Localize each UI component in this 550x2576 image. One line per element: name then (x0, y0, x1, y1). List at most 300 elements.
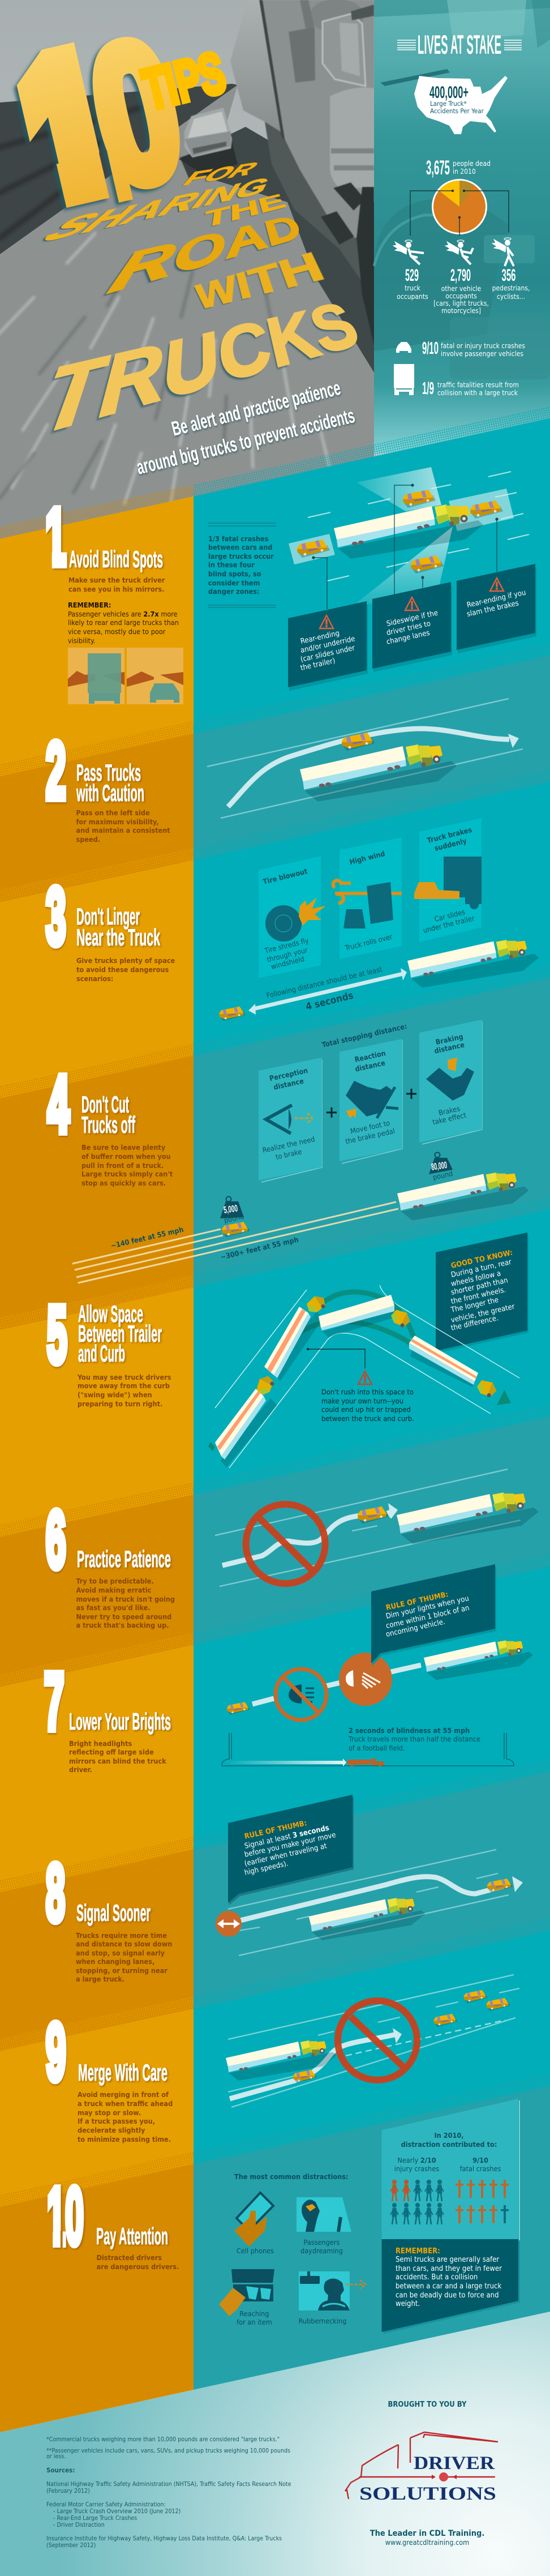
number 8: 8 (46, 1848, 65, 1938)
description: and stop, so signal early (76, 1949, 165, 1957)
beam path (252, 1665, 421, 1704)
box: rear-ending: the trailer) (300, 657, 336, 673)
footnotes and sources: National Highway Traffic Safety Administration (NHTSA), Traffic Safety Facts Research Note (46, 2481, 291, 2488)
tagline and website: www.greatcdltraining.com (385, 2538, 469, 2547)
description: preparing to turn right. (78, 1400, 162, 1408)
heading: Don't Linger (76, 903, 140, 930)
skid marks (72, 1202, 398, 1283)
box: rear-ending: Rear-ending (300, 629, 340, 646)
brought to you by: BROUGHT TO YOU BY (388, 2400, 467, 2409)
tip 7: lower your brights text (44, 1657, 171, 1774)
icon: reaching for an item: for an item (237, 2318, 272, 2326)
tip 2: pass trucks text: Pass Trucks (76, 759, 141, 786)
callout: rule of thumb (371, 1564, 496, 1666)
description: If a truck passes you, (78, 2117, 155, 2125)
stat: truck occupants (397, 266, 428, 301)
callout: remember: than cars, and they get in fewer (396, 2265, 502, 2273)
weight: 5,000 pound (220, 1197, 245, 1225)
weight: 80,000 pound: pound (432, 1169, 454, 1182)
description: a truck when traffic ahead (78, 2099, 173, 2108)
warning callout (307, 1348, 414, 1423)
title: THE: THE (201, 191, 290, 234)
heading: and Curb (78, 1340, 125, 1367)
description: ("swing wide") when (78, 1390, 152, 1399)
description: Avoid making erratic (76, 1586, 151, 1594)
weight: 5,000 pound: 5,000 (223, 1203, 238, 1216)
description: Bright headlights (69, 1739, 132, 1748)
icon: reaching for an item: Reaching (239, 2309, 269, 2318)
heading: most common distractions: The most common distractions: (234, 2172, 349, 2181)
stat: traffic fatalities: 1/9 (422, 378, 434, 398)
stat: people dead: people dead (453, 160, 491, 168)
map: United States with accidents per year (414, 76, 508, 134)
merging path arrow (230, 2028, 402, 2099)
panel: distraction statistics: Nearly 2/10 (397, 2156, 436, 2164)
callout: remember: can be deadly due to force and (396, 2291, 499, 2300)
footnotes and sources: (September 2012) (46, 2542, 96, 2549)
description: mirrors can blind the truck (69, 1757, 166, 1765)
logo: driver solutions: DRIVER (414, 2453, 495, 2474)
panel: truck brakes suddenly (414, 818, 482, 942)
panel: distraction statistics: injury crashes (394, 2164, 439, 2173)
panel: reaction distance: Move foot to (350, 1119, 390, 1136)
footnotes and sources: **Passenger vehicles include cars, vans, SUVs, and pickup trucks weighing 10,000 pounds (46, 2447, 290, 2454)
panel: distraction statistics: 9/10 (472, 2156, 488, 2164)
footnotes and sources: - Large Truck Crash Overview 2010 (June 2012) (53, 2508, 181, 2515)
tip 10 distractions (219, 2099, 520, 2334)
icon: vehicle occupant angel (445, 240, 473, 264)
tip 9 diagram (226, 1975, 519, 2107)
car (219, 1007, 246, 1021)
description: Give trucks plenty of space (76, 956, 175, 965)
box: slam brakes (457, 564, 536, 653)
description: a large truck. (76, 1975, 124, 1983)
description (77, 1373, 171, 1408)
callout: rule of thumb (228, 1795, 354, 1905)
photo: semi truck side (230, 0, 374, 345)
callout: rule of thumb: oncoming vehicle. (385, 1618, 446, 1639)
description (78, 2090, 173, 2143)
description (68, 576, 165, 593)
truck (334, 504, 483, 559)
tip 6: practice patience text (46, 1495, 175, 1629)
warning callout: Don't rush into this space to (321, 1388, 414, 1397)
truck (397, 1492, 539, 1544)
number 9: 9 (46, 2007, 66, 2097)
truck (300, 744, 457, 802)
stat: other vehicle occupants (433, 266, 489, 315)
box: slam brakes: Rear-ending if you (466, 588, 527, 610)
callout: good to know: the front wheels. (450, 1286, 506, 1306)
icon: cell phones: Cell phones (237, 2246, 274, 2255)
callout: good to know: GOOD TO KNOW: (450, 1248, 513, 1270)
car: side upper (403, 490, 436, 508)
box: rear-ending: and/or underride (300, 635, 356, 655)
description: reflecting off large side (69, 1748, 154, 1756)
following distance arrow (248, 965, 407, 1015)
tip 3 scenarios (219, 818, 539, 1021)
following distance arrow: Following distance should be at least (265, 965, 383, 1000)
note: 1/3 fatal crashes: in these four (208, 560, 255, 569)
description (81, 1143, 173, 1187)
car (358, 1507, 389, 1524)
description: as fast as you'd like. (76, 1603, 151, 1612)
note: 1/3 fatal crashes: blind spots, so (208, 570, 261, 578)
car (227, 1702, 250, 1715)
stat: other vehicle occupants: occupants (445, 292, 477, 300)
heading: total stopping distance: Total stopping distance: (321, 1022, 408, 1049)
callout: rule of thumb: Signal at least 3 seconds (244, 1824, 330, 1851)
panel: truck brakes suddenly: suddenly (433, 836, 468, 853)
map: United States with accidents per year: Accidents Per Year (430, 107, 484, 115)
icon: turn signal (216, 1911, 242, 1937)
tip 8: signal sooner text: Signal Sooner (76, 1899, 151, 1926)
stat: pedestrians: 356 (501, 266, 516, 285)
description: can see you in his mirrors. (68, 585, 164, 593)
number 7: 7 (44, 1657, 65, 1747)
stat: truck occupants: 529 (405, 266, 419, 285)
title: TIPS: TIPS (137, 40, 231, 122)
callout: rule of thumb: Dim your lights when you (385, 1594, 470, 1621)
tip 4: don't cut trucks off text: Trucks off (81, 1111, 135, 1138)
truck (397, 1173, 528, 1221)
panel: braking distance: Braking (435, 1032, 464, 1046)
stat: people dead: in 2010 (453, 168, 476, 176)
car merging (293, 2070, 317, 2083)
weaving path arrow (222, 1503, 398, 1565)
heading: lives at stake (397, 29, 522, 59)
icon: high beam in circle (339, 1653, 392, 1706)
callout: rule of thumb: come within 1 block of an (385, 1604, 470, 1631)
description (76, 1931, 172, 1983)
panel: truck brakes suddenly: under the trailer (422, 914, 475, 935)
truck (309, 1898, 426, 1940)
icon: low beam prohibited (276, 1669, 326, 1720)
callout: rule of thumb: RULE OF THUMB: (385, 1590, 449, 1612)
description: Trucks require more time (76, 1931, 167, 1940)
callout: rule of thumb: before you make your move (244, 1831, 337, 1859)
panel: tire blowout: Tire shreds fly (263, 936, 310, 955)
heading (76, 759, 144, 806)
panel: tire blowout: through your (266, 945, 308, 964)
panel: perception distance: Realize the need (261, 1135, 316, 1154)
icon: cell phones (234, 2193, 274, 2255)
description: and distance to slow down (76, 1940, 172, 1948)
callout: good to know: vehicle, the greater (450, 1303, 515, 1325)
panel: perception distance: to brake (275, 1147, 303, 1161)
subtitle (134, 376, 357, 479)
stat: other vehicle occupants: [cars, light trucks, (433, 299, 489, 307)
car: side lower (411, 555, 444, 574)
label: car stopping distance: ~140 feet at 55 mph (110, 1225, 184, 1250)
panel: lives at stake (393, 29, 530, 398)
main orange column (0, 497, 194, 2432)
title: WITH: WITH (194, 245, 332, 318)
note: seconds of blindness: 2 seconds of blindness at 55 mph (349, 1726, 470, 1735)
callout: good to know: During a turn, rear (450, 1258, 513, 1280)
stat: truck occupants: occupants (397, 293, 428, 301)
tip 5: allow space text (47, 1290, 171, 1408)
warning callout: could end up hit or trapped (321, 1406, 411, 1414)
callout: remember: between a car and a large truck (396, 2282, 501, 2291)
header photo: highway scene (0, 0, 550, 544)
icon: passengers daydreaming (297, 2197, 351, 2255)
heading (78, 1300, 162, 1367)
icon: truck occupant angel (393, 240, 424, 264)
tip 1 blind spot diagram (208, 467, 536, 691)
tip 4 stopping distance (72, 1020, 528, 1283)
weight: 80,000 pound: 80,000 (431, 1159, 448, 1173)
box: slam brakes: slam the brakes (466, 599, 519, 619)
curb lines (215, 1285, 519, 1468)
remember note: REMEMBER: (68, 601, 111, 609)
subtitle: Be alert and practice patience (169, 376, 343, 440)
note: 1/3 fatal crashes: danger zones: (208, 587, 260, 596)
connector lines (312, 484, 498, 609)
passing arrow (228, 729, 519, 807)
note: 1/3 fatal crashes: consider them (208, 579, 260, 587)
note: 1/3 fatal crashes: 1/3 fatal crashes (208, 534, 269, 543)
tip 2: pass trucks text: with Caution (76, 780, 144, 806)
remember note: vice versa, mostly due to poor (68, 627, 166, 636)
number 2: 2 (46, 726, 66, 816)
panel: high wind (333, 837, 402, 959)
footnotes and sources: - Rear-End Large Truck Crashes (53, 2515, 137, 2522)
direction arrow (497, 1390, 511, 1405)
title: SHARING: SHARING (26, 173, 274, 252)
wheel paths (290, 1292, 414, 1343)
description: for maximum visibility, (76, 818, 159, 826)
stat: pedestrians: cyclists... (497, 293, 525, 301)
tagline and website: The Leader in CDL Training. (370, 2529, 484, 2538)
icon: rubbernecking (299, 2271, 366, 2325)
panel: reaction distance (340, 1039, 402, 1163)
description: Pass on the left side (76, 808, 150, 817)
trailer positions (208, 1295, 478, 1467)
football field bracket (222, 1733, 514, 1766)
illustration: driver view from truck and car (68, 648, 183, 704)
tip 2 diagram: passing on the left (207, 699, 523, 818)
description: Make sure the truck driver (68, 576, 165, 584)
description: are dangerous drivers. (96, 2262, 179, 2271)
stat: traffic fatalities (394, 364, 519, 398)
description (76, 956, 175, 983)
map: United States with accidents per year: 400,000+ (429, 83, 469, 102)
description: Large trucks simply can't (81, 1170, 173, 1178)
stat: truck occupants: truck (405, 284, 421, 292)
heading (81, 1091, 135, 1138)
prohibition sign (338, 2001, 417, 2080)
box: rear-ending (288, 601, 368, 691)
description: Distracted drivers (96, 2253, 162, 2262)
description: stop as quickly as cars. (81, 1179, 166, 1187)
main teal column (194, 418, 550, 2390)
title: FOR: FOR (177, 157, 265, 190)
panel: distraction statistics: In 2010, (434, 2131, 464, 2139)
signal path arrow (240, 1876, 523, 1920)
icon: reaching for an item (219, 2269, 274, 2326)
tip 5: allow space text: Between Trailer (78, 1320, 162, 1347)
tagline and website (370, 2529, 484, 2547)
icon: rubbernecking: Rubbernecking (299, 2317, 346, 2325)
tip 9: merge with care text: Merge With Care (78, 2059, 167, 2086)
box: sideswipe (372, 582, 452, 672)
car (487, 1878, 513, 1893)
footnotes and sources: Sources: (46, 2466, 75, 2474)
tip 4: don't cut trucks off text (48, 1059, 173, 1187)
icon: passengers daydreaming: Passengers (304, 2238, 340, 2246)
number 10: 10 (47, 2171, 84, 2261)
cabs (253, 1294, 499, 1400)
tip 8: signal sooner text (46, 1848, 172, 1983)
alternating darker bands (0, 406, 550, 2432)
icons: fatal crosses (456, 2180, 509, 2223)
panel: tire blowout: Tire blowout (262, 867, 308, 886)
number 4: 4 (48, 1059, 70, 1149)
tip 1: avoid blind spots text (45, 492, 183, 704)
callout: rule of thumb: RULE OF THUMB: (244, 1819, 308, 1841)
footnotes and sources: *Commercial trucks weighing more than 10,000 pounds are considered "large trucks." (46, 2436, 280, 2443)
description: pull in front of a truck. (81, 1161, 164, 1170)
note: 1/3 fatal crashes: large trucks occur (208, 552, 274, 560)
panel: reaction distance: the brake pedal (345, 1127, 396, 1145)
panel: perception distance: distance (273, 1076, 304, 1092)
description: may stop or slow. (78, 2108, 141, 2117)
warning callout: make your own turn--you (321, 1397, 403, 1406)
panel: truck brakes suddenly: Car slides (433, 908, 466, 923)
subtitle: around big trucks to prevent accidents (134, 404, 357, 479)
title: TRUCKS: TRUCKS (19, 292, 371, 464)
number 3: 3 (46, 871, 66, 961)
number 1: 1 (45, 492, 66, 582)
road dashes (308, 472, 529, 581)
panel: distraction statistics: distraction contributed to: (401, 2140, 497, 2149)
description: to minimize passing time. (78, 2135, 171, 2143)
remember note: Passenger vehicles are 2.7x more (68, 610, 178, 618)
remember note: likely to rear end large trucks than (68, 618, 179, 627)
footnotes and sources: or less. (46, 2453, 66, 2460)
title: ROAD: ROAD (88, 210, 310, 314)
callout: good to know: the difference. (450, 1314, 499, 1333)
panel: braking distance: Brakes (438, 1104, 461, 1117)
heading: Don't Cut (81, 1091, 129, 1118)
panel: distraction statistics (381, 2099, 519, 2240)
distance arrow (225, 1758, 346, 1766)
description: Be sure to leave plenty (81, 1143, 166, 1152)
map: United States with accidents per year: Large Truck* (430, 100, 467, 108)
title: 10: 10 (6, 0, 199, 244)
description: scenarios: (76, 974, 113, 983)
footnotes and sources (46, 2436, 291, 2549)
description: decelerate slightly (78, 2126, 145, 2134)
tip 10: pay attention text: Pay Attention (96, 2223, 168, 2249)
description: stopping, or turning near (76, 1966, 167, 1975)
truck (407, 940, 539, 988)
stat: passenger vehicles: involve passenger vehicles (441, 350, 523, 358)
stat: pedestrians (492, 266, 530, 301)
stat: passenger vehicles (396, 338, 525, 358)
stat: pedestrians: pedestrians, (492, 284, 530, 292)
stat: traffic fatalities: traffic fatalities result from (437, 381, 519, 389)
tip 5 turn diagram (208, 1233, 528, 1468)
footnotes and sources: Federal Motor Carrier Safety Administration: (46, 2501, 166, 2508)
description: when changing lanes, (76, 1957, 154, 1966)
logo: driver solutions (345, 2432, 498, 2504)
description: Avoid merging in front of (78, 2090, 169, 2099)
truck (424, 1640, 533, 1680)
note: 1/3 fatal crashes (208, 523, 276, 607)
tip 1: avoid blind spots text: Avoid Blind Spots (69, 546, 163, 572)
panel: distraction statistics: fatal crashes (460, 2164, 501, 2173)
description: a truck that's backing up. (76, 1621, 169, 1629)
box: sideswipe: change lanes (386, 629, 431, 647)
panel: perception distance: Perception (269, 1066, 308, 1082)
description: You may see truck drivers (77, 1373, 171, 1381)
icon: passengers daydreaming: daydreaming (300, 2246, 343, 2255)
warning callout: between the truck and curb. (321, 1415, 414, 1423)
tip 8 diagram (216, 1795, 523, 1955)
following distance arrow: 4 seconds (304, 990, 355, 1013)
description: move away from the curb (78, 1381, 170, 1390)
stat: passenger vehicles: 9/10 (422, 338, 439, 358)
callout: good to know (436, 1233, 528, 1353)
description: driver. (69, 1765, 92, 1774)
note: seconds of blindness (348, 1726, 480, 1752)
text: Practice Patience (77, 1546, 171, 1572)
label: truck stopping distance: ~300+ feet at 55 mph (220, 1235, 299, 1261)
tip 9: merge with care text (46, 2007, 173, 2143)
panel: high wind: High wind (349, 849, 386, 866)
panel: reaction distance: Reaction (354, 1049, 386, 1064)
panel: high wind: Truck rolls over (343, 932, 393, 952)
panel: braking distance (419, 1020, 482, 1144)
panel: tire blowout (259, 856, 326, 978)
cars ahead (434, 1990, 510, 2027)
panel: braking distance: distance (433, 1040, 465, 1055)
danger zones (289, 467, 514, 607)
text: Lower Your Brights (69, 1708, 171, 1735)
callout: rule of thumb: (earlier when traveling at (244, 1842, 328, 1868)
stat: passenger vehicles: fatal or injury truck crashes (441, 342, 525, 350)
callout: remember: accidents. But a collision (396, 2273, 478, 2282)
description (69, 1739, 166, 1774)
description (76, 808, 170, 844)
number 6: 6 (46, 1495, 66, 1585)
remember note: visibility. (68, 636, 95, 645)
description: and maintain a consistent (76, 826, 170, 835)
description: moves if a truck isn't going (76, 1595, 175, 1603)
remember note (68, 601, 179, 645)
plus signs (326, 1089, 416, 1118)
callout: good to know: shorter path than (450, 1276, 509, 1297)
tip 6 diagram (215, 1469, 539, 1586)
stat: traffic fatalities: collision with a large truck (437, 389, 518, 397)
heading: Near the Truck (76, 924, 160, 951)
car (222, 1222, 250, 1237)
weight: 80,000 pound (429, 1153, 454, 1182)
heading (76, 903, 160, 951)
truck (226, 2040, 336, 2081)
footer background (0, 2312, 550, 2576)
stat: other vehicle occupants: motorcycles] (441, 307, 481, 315)
description: Never try to speed around (76, 1612, 171, 1621)
callout: remember (381, 2239, 520, 2334)
description: to avoid these dangerous (76, 965, 169, 974)
stat: other vehicle occupants: other vehicle (441, 285, 482, 293)
footnotes and sources: Insurance Institute for Highway Safety, Highway Loss Data Institute, Q&A: Large Trucks (46, 2535, 282, 2542)
panel: tire blowout: windshield (270, 955, 305, 971)
icons: injury people (390, 2180, 444, 2224)
